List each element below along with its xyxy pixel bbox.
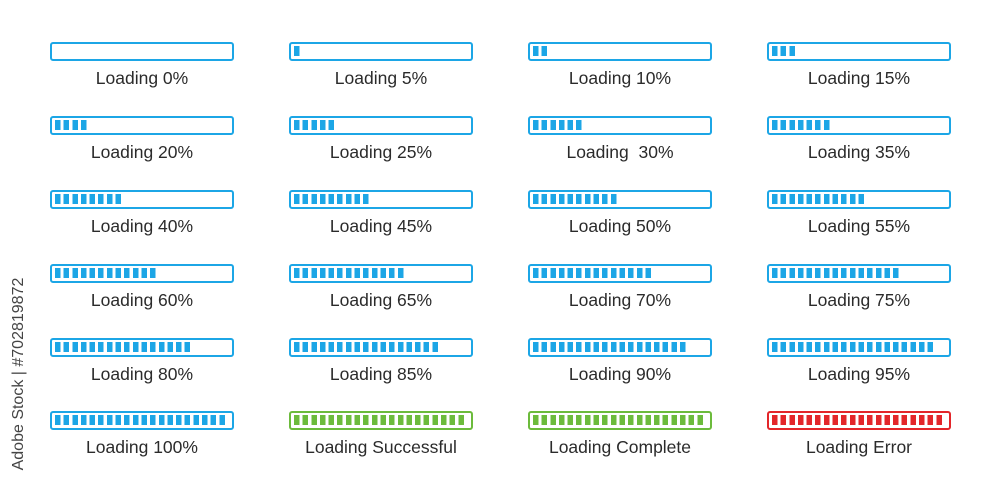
row 2: [50, 116, 951, 162]
loading 0%: Loading 0%: [96, 68, 188, 88]
loading 50%: Loading 50%: [569, 216, 671, 236]
loading 70%: [528, 264, 712, 310]
loading 100%: Loading 100%: [86, 437, 198, 457]
loading 95%: Loading 95%: [808, 364, 910, 384]
row 4: [50, 264, 951, 310]
loading 65%: [289, 264, 473, 310]
loading 20%: Loading 20%: [91, 142, 193, 162]
row 5: [50, 338, 951, 384]
loading 15%: Loading 15%: [808, 68, 910, 88]
loading error: [767, 411, 951, 457]
loading complete: [528, 411, 712, 457]
row 3: [50, 190, 951, 236]
loading successful: Loading Successful: [305, 437, 457, 457]
loading 20%: [50, 116, 234, 162]
loading 60%: Loading 60%: [91, 290, 193, 310]
loading 40%: [50, 190, 234, 236]
loading 35%: Loading 35%: [808, 142, 910, 162]
loading error: Loading Error: [806, 437, 912, 457]
loading 15%: [767, 42, 951, 88]
watermark text: Adobe Stock | #702819872: [10, 278, 27, 470]
row 1: [50, 42, 951, 88]
loading 30%: Loading 30%: [566, 142, 674, 162]
loading 85%: Loading 85%: [330, 364, 432, 384]
loading 25%: Loading 25%: [330, 142, 432, 162]
loading 75%: Loading 75%: [808, 290, 910, 310]
loading 5%: Loading 5%: [335, 68, 427, 88]
loading 100%: [50, 411, 234, 457]
loading 30%: [528, 116, 712, 162]
loading 40%: Loading 40%: [91, 216, 193, 236]
loading 95%: [767, 338, 951, 384]
loading 80%: [50, 338, 234, 384]
loading 75%: [767, 264, 951, 310]
loading 5%: [289, 42, 473, 88]
loading 10%: [528, 42, 712, 88]
loading 25%: [289, 116, 473, 162]
loading successful: [289, 411, 473, 457]
loading 55%: [767, 190, 951, 236]
row 6: [50, 411, 951, 457]
loading 85%: [289, 338, 473, 384]
loading complete: Loading Complete: [549, 437, 691, 457]
loading 35%: [767, 116, 951, 162]
loading 60%: [50, 264, 234, 310]
loading 90%: [528, 338, 712, 384]
loading 55%: Loading 55%: [808, 216, 910, 236]
loading 50%: [528, 190, 712, 236]
loading 80%: Loading 80%: [91, 364, 193, 384]
loading 45%: [289, 190, 473, 236]
loading 65%: Loading 65%: [330, 290, 432, 310]
loading 45%: Loading 45%: [330, 216, 432, 236]
loading 90%: Loading 90%: [569, 364, 671, 384]
loading 0%: [50, 42, 234, 88]
loading 10%: Loading 10%: [569, 68, 671, 88]
loading 70%: Loading 70%: [569, 290, 671, 310]
